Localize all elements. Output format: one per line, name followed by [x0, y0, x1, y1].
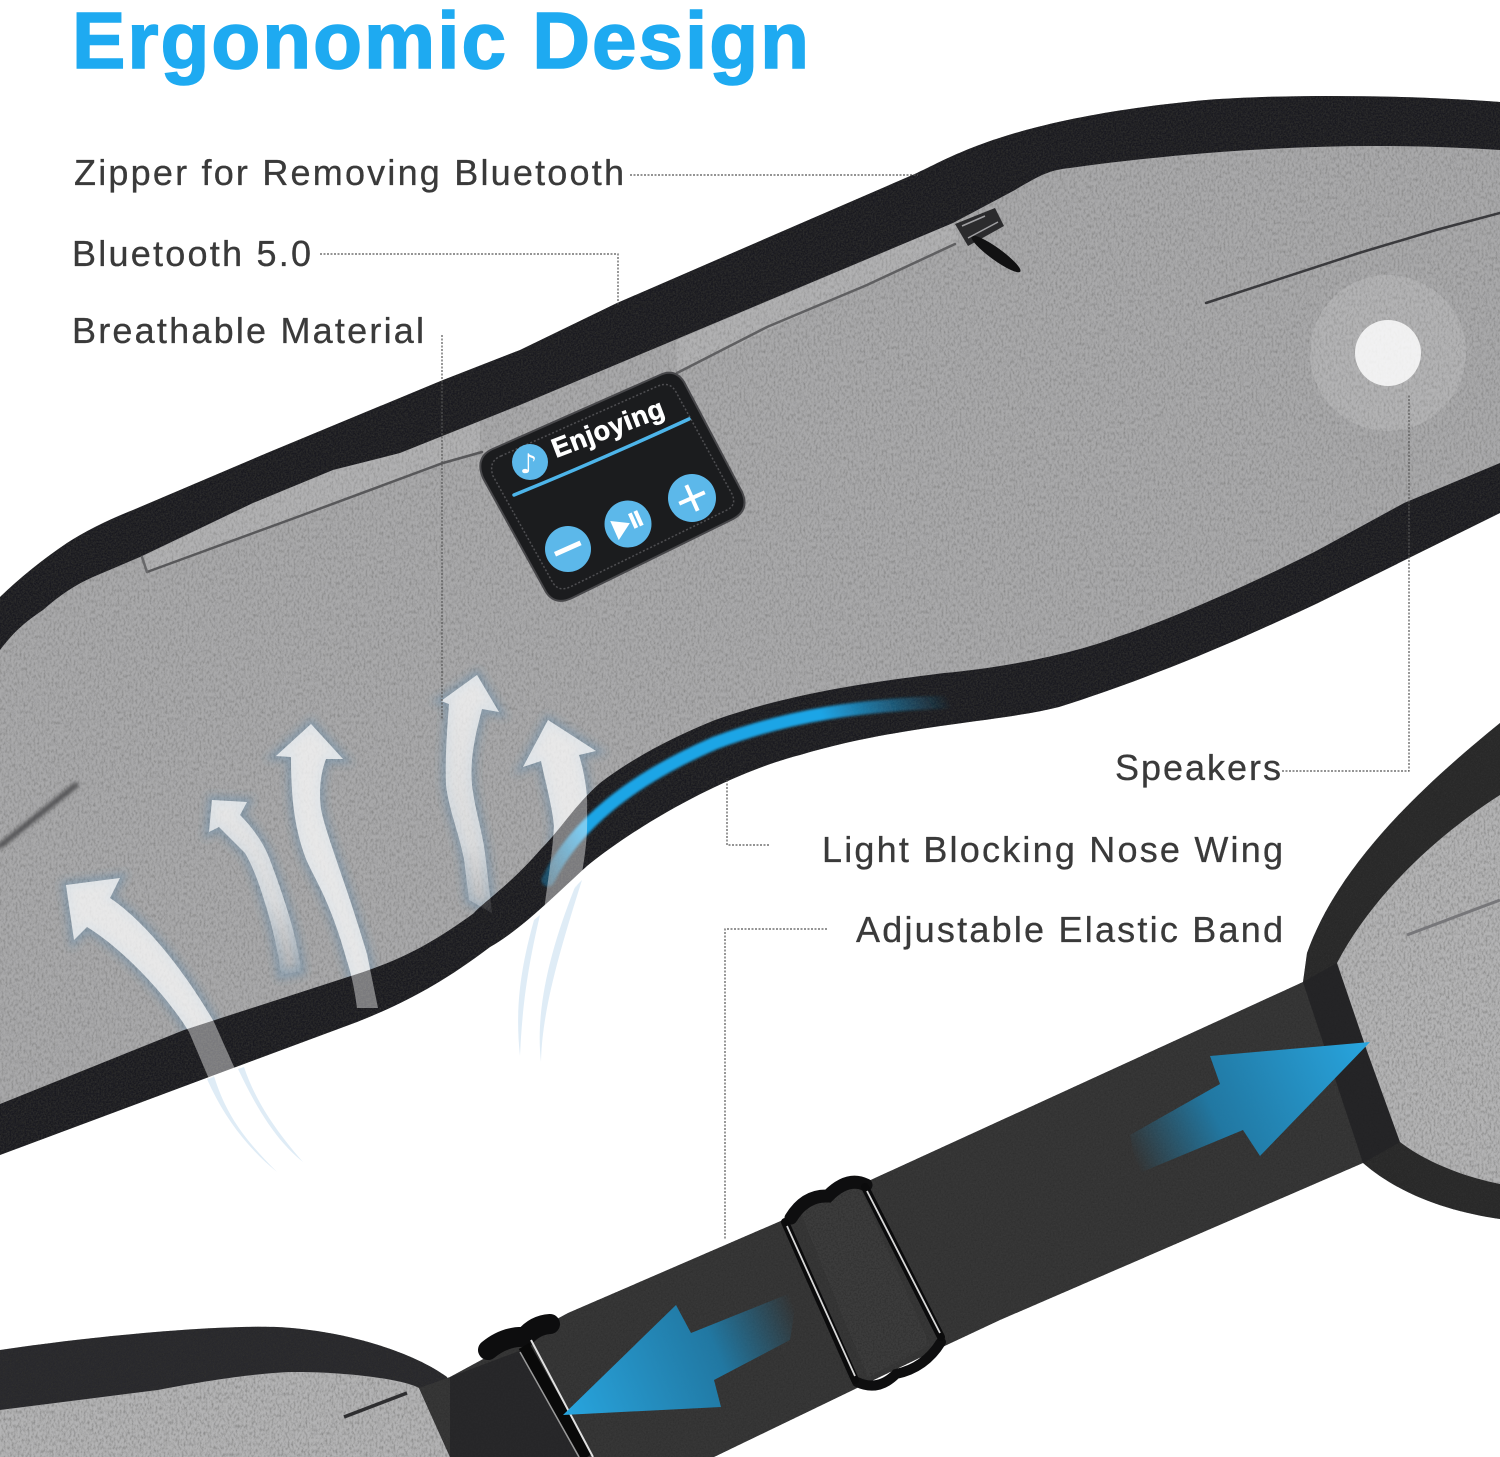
arrow 1 [66, 878, 235, 1079]
label: elastic band: Adjustable Elastic Band [856, 909, 1283, 950]
pocket seams [0, 213, 1500, 846]
nose wing blue highlight [548, 702, 950, 880]
label: bluetooth: Bluetooth 5.0 [72, 233, 311, 274]
mask black binding [0, 96, 1500, 1155]
icon: music note [512, 444, 548, 480]
label: speakers: Speakers [1115, 747, 1281, 788]
button: play pause [604, 500, 652, 548]
strap arrow: right [1130, 1042, 1370, 1174]
arrow 5 [523, 720, 596, 920]
airflow arrows [66, 675, 596, 1079]
icon: zipper pull [955, 208, 1024, 276]
pocket lighter flaps [142, 223, 960, 572]
patch stitching [492, 384, 734, 589]
mask grey fabric [0, 146, 1500, 1104]
patch body [480, 373, 745, 601]
slider top tabs [791, 1182, 866, 1218]
buckle dark strap [450, 1350, 578, 1457]
label: zipper: Zipper for Removing Bluetooth [74, 152, 624, 193]
strap arrow: left [563, 1290, 798, 1415]
label: breathable material: Breathable Material [72, 310, 424, 351]
button: plus [668, 474, 716, 522]
arrow 4 [441, 675, 499, 913]
button: minus [545, 526, 591, 572]
airflow arrows brighter part on fabric [66, 675, 596, 1029]
arrow 3 [276, 724, 378, 1008]
elastic strap [419, 963, 1400, 1457]
leader lines [320, 175, 1409, 1240]
right mask piece binding [1303, 723, 1500, 1219]
bottom-left mask piece [0, 1327, 470, 1457]
right seam [1407, 900, 1500, 935]
control patch [480, 373, 745, 601]
slider right rail [865, 1187, 941, 1337]
right mask piece fabric [1337, 795, 1500, 1184]
left fabric [0, 1372, 450, 1457]
left seam [344, 1393, 407, 1417]
arrow 2 [209, 800, 301, 975]
icon: speaker marker [1310, 275, 1466, 431]
slider fabric [798, 1185, 930, 1378]
strap end seam on right [1303, 963, 1400, 1163]
strap slider [785, 1182, 941, 1386]
buckle highlight 2 [520, 1352, 579, 1457]
left binding [0, 1327, 470, 1457]
slider left rail [785, 1222, 855, 1380]
patch brand text: Enjoying [547, 393, 668, 464]
sleep mask main body [0, 96, 1500, 1155]
airflow arrow glow [66, 675, 596, 1079]
slider bottom tabs [857, 1342, 941, 1386]
airflow wisps [207, 880, 582, 1172]
label: nose wing: Light Blocking Nose Wing [822, 829, 1283, 870]
icon: music note: ♪ [520, 449, 537, 480]
buckle highlight 1 [531, 1340, 593, 1457]
patch blue line [514, 419, 689, 495]
buckle rails [524, 1346, 587, 1457]
strap buckle [450, 1324, 593, 1457]
right fabric [1337, 795, 1500, 1184]
buckle tabs [488, 1324, 550, 1350]
